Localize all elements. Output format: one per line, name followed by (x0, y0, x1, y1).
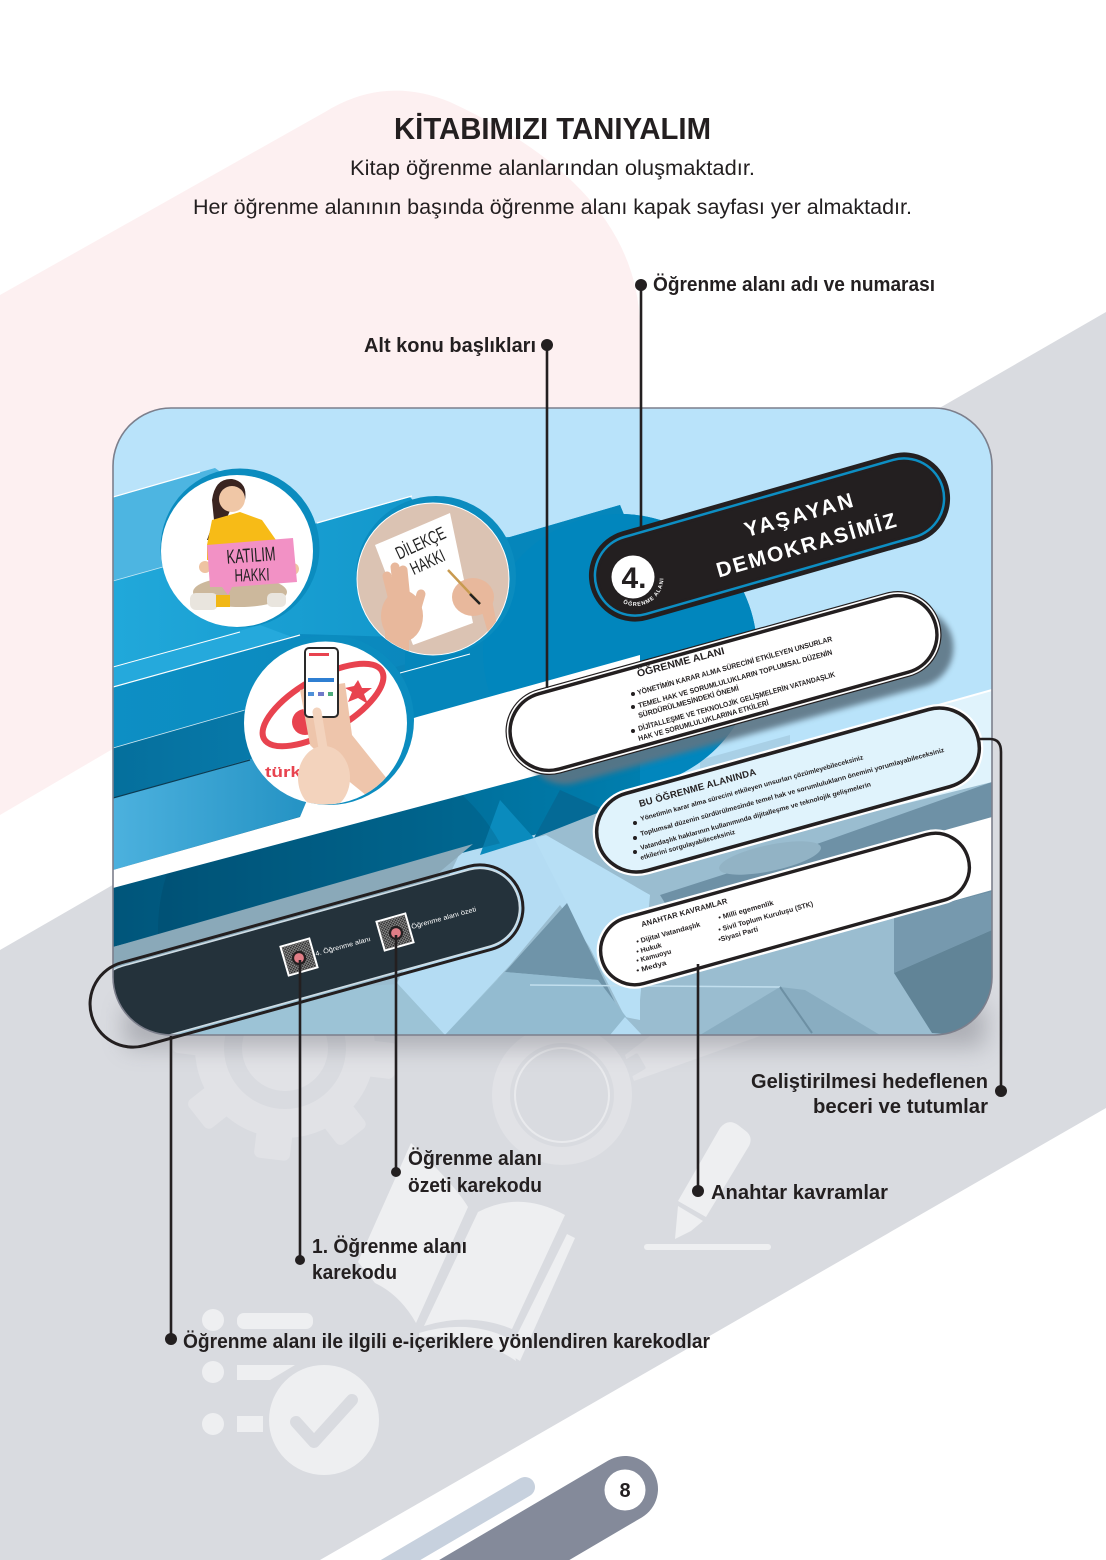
pill: learning area topics: HAK VE SORUMLULUKLARINA ETKİLERİ (637, 698, 770, 743)
photo circle: e-Devlet: o (343, 762, 352, 779)
label: summary QR: Öğrenme alanı (408, 1147, 542, 1170)
number badge (612, 556, 664, 606)
lower photo region (113, 782, 992, 1040)
label: summary QR (408, 1147, 542, 1197)
light paper shapes (397, 835, 589, 1034)
label: learning area QR: karekodu (312, 1262, 397, 1284)
pill: learning area topics (496, 582, 951, 784)
pill: key concepts: • Sivil Toplum Kuruluşu (STK) (718, 901, 814, 934)
title: KİTABIMIZI TANIYALIM (394, 111, 711, 146)
photo circle: Katılım hakkı: HAKKI (234, 564, 270, 586)
background icon: open book (358, 1143, 575, 1361)
card shadow (125, 1005, 985, 1047)
label: skills and attitudes: beceri ve tutumlar (813, 1096, 988, 1118)
pill: learning area topics: DİJİTALLEŞME VE TEKNOLOJİK GELİŞMELERİN VATANDAŞLIK (637, 670, 837, 733)
label: summary QR: özeti karekodu (408, 1175, 542, 1197)
gray diagonal background band (0, 312, 1106, 1560)
pill shadow (515, 598, 963, 794)
QR code: summary: Öğrenme alanı özeti (410, 905, 478, 931)
label: learning area QR: 1. Öğrenme alanı (312, 1235, 467, 1258)
label: learning area name and number: Öğrenme alanı adı ve numarası (653, 273, 935, 296)
background icon: pencil (644, 1122, 771, 1250)
pink background shape (0, 91, 640, 815)
light blue band (881, 691, 992, 810)
pill: key concepts: •Siyasi Parti (718, 926, 759, 944)
band: second tone (195, 625, 290, 664)
thin white lines (113, 472, 470, 748)
background icon: gear (172, 958, 398, 1161)
background icon: checklist (202, 1309, 379, 1475)
label: key concepts: Anahtar kavramlar (711, 1182, 888, 1204)
subtitle line 2: Her öğrenme alanının başında öğrenme alanı kapak sayfası yer almaktadır. (193, 195, 912, 219)
pill: key concepts: • Kamuoyu (636, 949, 672, 965)
pill: key concepts: • Medya (636, 960, 668, 975)
page number tab (375, 1470, 646, 1560)
photo circle: e-Devlet (244, 635, 414, 810)
title text: YAŞAYAN (742, 489, 856, 542)
main card panel (112, 407, 993, 1036)
pill: key concepts: • Milli egemenlik (718, 900, 775, 922)
callout dots (165, 279, 1007, 1345)
pill: skills and attitudes (587, 699, 989, 881)
pill: skills and attitudes: etkilerini sorgulayabileceksiniz (640, 829, 737, 862)
pill: learning area title (578, 442, 961, 632)
translucent strip (113, 844, 473, 968)
label: skills and attitudes: Geliştirilmesi hedeflenen (751, 1071, 988, 1093)
QR code: learning area: 4. Öğrenme alanı (314, 935, 372, 958)
big translucent circle (158, 796, 500, 934)
QR code: summary (375, 905, 478, 952)
number badge: ÖĞRENME ALANI (624, 578, 664, 606)
pill: learning area topics: TEMEL HAK VE SORUMLULUKLARIN TOPLUMSAL DÜZENİN (637, 648, 833, 710)
pill: key concepts: • Hukuk (636, 942, 663, 956)
white diagonal stripe (113, 655, 640, 888)
pill: skills and attitudes: Vatandaşlık haklarının kullanımında dijitalleşme ve teknolojik gelişmelerin (640, 781, 872, 852)
subtitle line 1: Kitap öğrenme alanlarından oluşmaktadır. (350, 156, 755, 180)
label: e-content QR: Öğrenme alanı ile ilgili e-içeriklere yönlendiren karekodlar (183, 1330, 710, 1353)
photo circle: Katılım hakkı (160, 468, 320, 628)
pill: learning area topics: ÖĞRENME ALANI (635, 644, 726, 680)
photo circle: Dilekçe hakkı (356, 496, 516, 660)
pill: skills and attitudes: Toplumsal düzenin sürdürülmesinde temel hak ve sorumlulukların önemini yorumlayabileceksiniz (640, 747, 946, 838)
pill: key concepts (593, 825, 977, 993)
number badge: 4. (621, 562, 647, 595)
band: top left light (114, 468, 220, 581)
label: subtopics: Alt konu başlıkları (364, 335, 536, 357)
pill: key concepts: • Dijital Vatandaşlık (636, 922, 701, 946)
sign text: KATILIM (226, 543, 276, 569)
pill: learning area topics: SÜRDÜRÜLMESİNDEKİ ÖNEMİ (637, 683, 740, 720)
background icon: magnifier (492, 1025, 760, 1165)
photo right side (660, 782, 992, 904)
page number tab: 8 (619, 1480, 631, 1502)
pill: QR code outline (80, 855, 533, 1057)
pill: skills and attitudes: BU ÖĞRENME ALANINDA (638, 766, 758, 810)
label: learning area QR (312, 1235, 467, 1284)
photo circle: Dilekçe hakkı: HAKKI (407, 545, 448, 579)
label: skills and attitudes (751, 1071, 988, 1118)
pill: skills and attitudes: Yönetimin karar alma sürecini etkileyen unsurları çözümleyebileceksiniz (640, 754, 865, 823)
white band at right (944, 817, 992, 902)
callout lines (171, 285, 1001, 1339)
dark lower band (114, 765, 640, 947)
pill: key concepts: ANAHTAR KAVRAMLAR (640, 896, 729, 929)
band: main blue area (114, 497, 624, 870)
pill: bottom dark inner fill (114, 868, 520, 1034)
big blue circle (624, 514, 756, 775)
uniform blue right of the circles (414, 505, 624, 718)
pill: learning area topics: YÖNETİMİN KARAR ALMA SÜRECİNİ ETKİLEYEN UNSURLAR (636, 634, 834, 697)
logo text: türk (265, 764, 302, 781)
pill: learning area title: DEMOKRASİMİZ (714, 509, 899, 582)
QR code: learning area (279, 935, 372, 977)
paper text: DİLEKÇE (392, 523, 449, 563)
